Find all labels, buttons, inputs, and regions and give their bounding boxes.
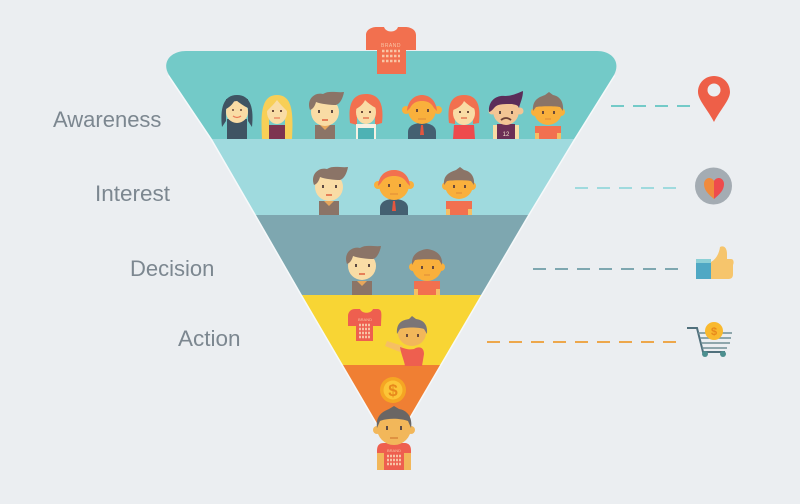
person: man in red tee bbox=[531, 92, 565, 139]
icon: shopping cart with coin: $ bbox=[711, 326, 717, 338]
icon: red t-shirt in action band bbox=[348, 309, 381, 341]
dashed connector: awareness bbox=[611, 105, 692, 107]
person: shopper pointing at shirt bbox=[385, 316, 427, 366]
dashed connector: interest bbox=[575, 187, 680, 189]
funnel band: decision bbox=[256, 215, 528, 295]
icon: red t-shirt in action band: BRAND bbox=[358, 317, 372, 322]
icon: brand t-shirt: BRAND bbox=[381, 43, 401, 49]
stage label: Decision: Decision bbox=[130, 256, 214, 281]
person: dark-haired woman bbox=[221, 95, 253, 139]
person: man with moustache and jersey bbox=[488, 91, 524, 139]
funnel band: awareness bbox=[166, 51, 616, 139]
person: red-haired woman bbox=[350, 94, 382, 139]
person: brown-haired man bbox=[309, 92, 344, 139]
funnel bbox=[166, 51, 616, 448]
person: customer wearing brand shirt bbox=[373, 406, 415, 470]
stage label: Action: Action bbox=[178, 326, 241, 351]
icon: map pin bbox=[698, 76, 730, 122]
person: red-haired woman in red bbox=[449, 95, 479, 139]
icon: brand t-shirt bbox=[366, 27, 416, 74]
person: blonde woman bbox=[262, 95, 292, 139]
person: man in red tee, decision bbox=[409, 249, 445, 295]
icon: gold dollar coin: $ bbox=[388, 381, 398, 400]
person: balding man, interest bbox=[374, 170, 414, 215]
funnel band: purchase bbox=[343, 365, 440, 448]
icon: gold dollar coin bbox=[380, 377, 406, 403]
dashed connector: action bbox=[487, 341, 680, 343]
person: customer wearing brand shirt: BRAND bbox=[387, 448, 401, 453]
person: man with moustache and jersey: 12 bbox=[503, 132, 510, 138]
person: brown-haired man, interest bbox=[313, 167, 348, 215]
icon: shopping cart with coin bbox=[687, 322, 732, 357]
person: brown-haired man, decision bbox=[346, 246, 381, 295]
icon: thumbs up bbox=[696, 246, 734, 279]
person: balding man in navy bbox=[402, 95, 442, 139]
dashed connector: decision bbox=[533, 268, 680, 270]
icon: heart badge bbox=[695, 168, 732, 204]
stage label: Awareness: Awareness bbox=[53, 107, 161, 132]
funnel band: action bbox=[302, 295, 481, 365]
person: man in red tee, interest bbox=[442, 167, 476, 215]
stage label: Interest: Interest bbox=[95, 181, 171, 206]
funnel band: interest bbox=[212, 139, 574, 215]
